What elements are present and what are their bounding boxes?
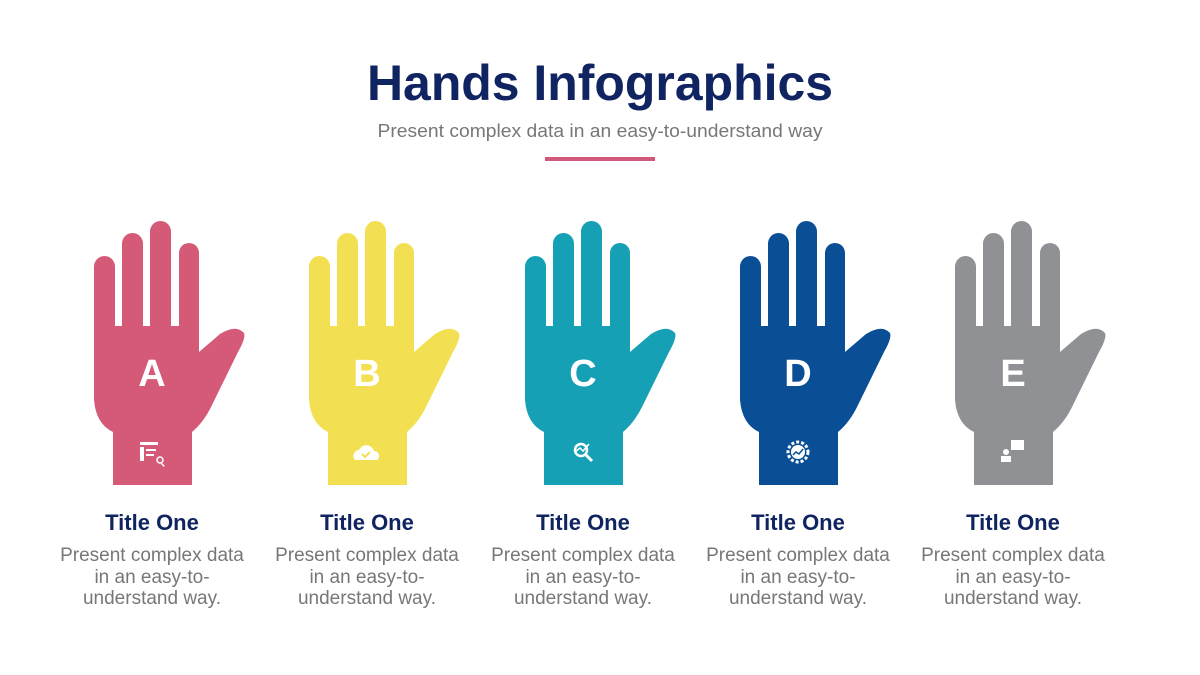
hand C [525, 221, 675, 485]
icon: cloud check [353, 445, 379, 460]
hand A: A [138, 353, 166, 395]
caption D [706, 510, 890, 609]
caption C: understand way. [514, 588, 652, 609]
caption B [275, 510, 459, 609]
caption B: understand way. [298, 588, 436, 609]
caption A [60, 510, 244, 609]
hand D [740, 221, 890, 485]
hand B: B [353, 353, 381, 395]
caption D: understand way. [729, 588, 867, 609]
caption E [921, 510, 1105, 609]
caption D: in an easy-to- [740, 567, 856, 588]
icon: gear chart [788, 442, 808, 462]
caption B: in an easy-to- [309, 567, 425, 588]
hand D: D [784, 353, 812, 395]
caption C: Title One [536, 510, 630, 535]
caption E: in an easy-to- [955, 567, 1071, 588]
caption D: Present complex data [706, 545, 890, 566]
caption C: Present complex data [491, 545, 675, 566]
title: Hands Infographics [367, 55, 833, 111]
caption B: Title One [320, 510, 414, 535]
caption E: understand way. [944, 588, 1082, 609]
caption A: Present complex data [60, 545, 244, 566]
caption C [491, 510, 675, 609]
hand A [94, 221, 244, 485]
hand E [955, 221, 1105, 485]
icon: report search [140, 442, 165, 467]
accent line [545, 157, 655, 161]
hand B [309, 221, 459, 485]
subtitle: Present complex data in an easy-to-understand way [378, 121, 822, 141]
caption A: in an easy-to- [94, 567, 210, 588]
caption A: understand way. [83, 588, 221, 609]
hand E: E [1000, 353, 1026, 395]
icon: presenter [1001, 440, 1024, 462]
icon: growth search [575, 444, 592, 461]
hand C: C [569, 353, 597, 395]
caption B: Present complex data [275, 545, 459, 566]
caption C: in an easy-to- [525, 567, 641, 588]
caption E: Present complex data [921, 545, 1105, 566]
caption A: Title One [105, 510, 199, 535]
caption E: Title One [966, 510, 1060, 535]
caption D: Title One [751, 510, 845, 535]
captions [60, 510, 1105, 609]
